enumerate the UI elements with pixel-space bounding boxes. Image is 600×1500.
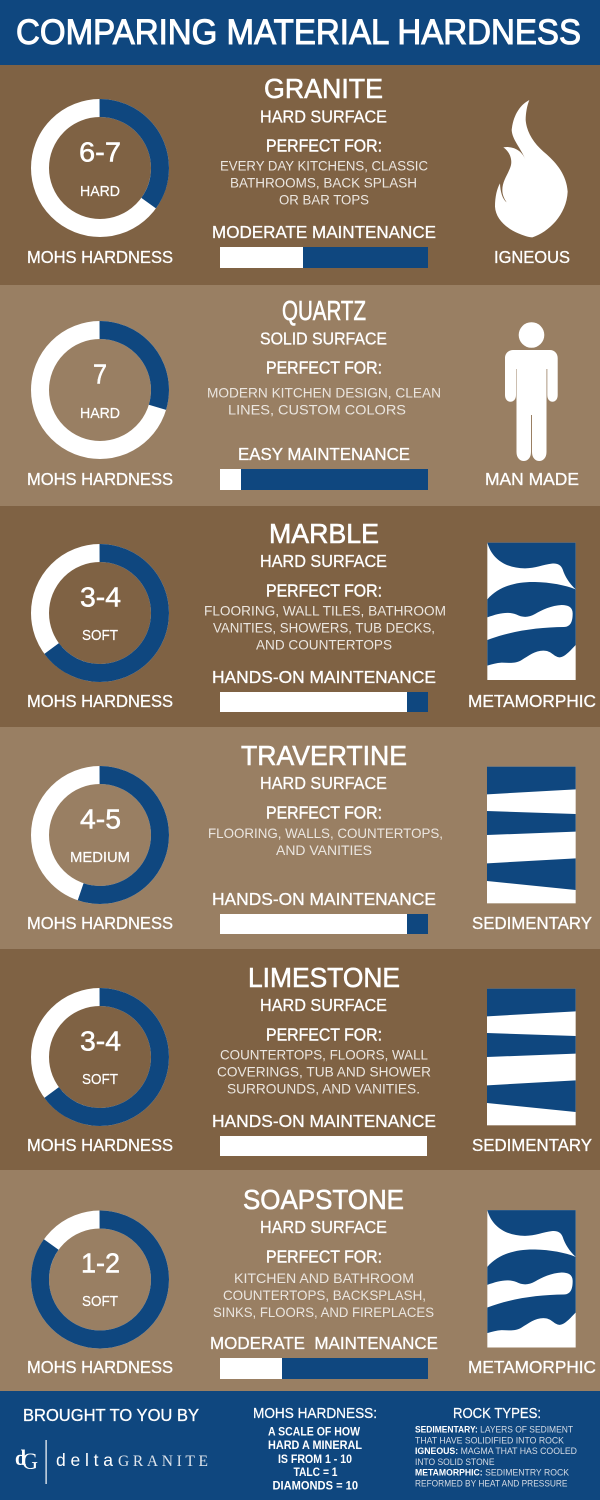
uses text [208,825,443,858]
donut chart: quartz 7 hard [40,330,160,450]
uses text: LINES, CUSTOM COLORS [228,402,406,418]
logo: delta granite: delta [56,1450,113,1470]
subheading: HARD SURFACE [260,1217,387,1237]
perfect for heading: PERFECT FOR: [266,358,382,378]
donut chart: limestone 3-4 soft [40,997,160,1117]
maintenance bar [220,1358,428,1379]
logo: delta granite: G [22,1449,38,1474]
logo: delta granite [15,1440,208,1484]
icon: sedimentary layers [487,989,576,1125]
maintenance label: HANDS-ON MAINTENANCE [212,889,436,909]
donut chart: travertine 4-5 medium [40,775,160,895]
perfect for heading: PERFECT FOR: [266,580,382,600]
icon: flame [495,100,568,237]
maintenance label: HANDS-ON MAINTENANCE [212,1111,436,1131]
panel: limestone [0,949,600,1170]
uses text: FLOORING, WALLS, COUNTERTOPS, [208,825,443,841]
rock type label: SEDIMENTARY [472,1135,592,1155]
mohs hardness explanation: HARD A MINERAL [268,1440,362,1452]
donut label: MOHS HARDNESS [27,913,173,933]
maintenance bar [220,469,428,490]
heading: travertine: TRAVERTINE [241,740,407,771]
icon: metamorphic layers [487,1210,576,1347]
uses text: AND COUNTERTOPS [256,636,392,652]
donut chart: travertine 4-5 medium: 4-5 [80,804,121,834]
uses text [217,1046,431,1096]
uses text [213,1270,434,1320]
donut chart: granite 6-7 hard [40,108,160,228]
perfect for heading: PERFECT FOR: [266,802,382,822]
donut label: MOHS HARDNESS [27,247,173,267]
rock type label: SEDIMENTARY [472,913,592,933]
logo: delta granite: d [15,1445,26,1470]
donut chart: granite 6-7 hard: 6-7 [79,136,121,168]
mohs hardness explanation [253,1405,377,1492]
donut label: MOHS HARDNESS [27,469,173,489]
rock types explanation: THAT HAVE SOLIDIFIED INTO ROCK [415,1436,565,1446]
uses text: BATHROOMS, BACK SPLASH [230,174,417,190]
subheading: HARD SURFACE [260,995,387,1015]
uses text [220,158,428,208]
heading: marble: MARBLE [269,518,379,549]
perfect for heading: PERFECT FOR: [266,136,382,156]
uses text [207,384,441,418]
donut chart: soapstone 1-2 soft [40,1220,160,1340]
uses text: AND VANITIES [276,842,372,858]
subheading: HARD SURFACE [260,773,387,793]
uses text: COUNTERTOPS, FLOORS, WALL [220,1046,428,1062]
brought to you by heading: BROUGHT TO YOU BY [23,1405,199,1425]
donut chart: marble 3-4 soft: SOFT [82,628,118,644]
icon: person [505,322,558,461]
icon: sedimentary layers [487,767,576,903]
mohs hardness explanation: TALC = 1 [294,1467,338,1479]
maintenance label: MODERATE MAINTENANCE [210,1333,438,1353]
panel: marble [0,506,600,727]
donut chart: soapstone 1-2 soft: SOFT [82,1294,118,1310]
panel: soapstone [0,1170,600,1391]
donut label: MOHS HARDNESS [27,691,173,711]
perfect for heading: PERFECT FOR: [266,1024,382,1044]
uses text: MODERN KITCHEN DESIGN, CLEAN [207,384,441,400]
rock types explanation: ROCK TYPES: [453,1405,541,1422]
uses text: OR BAR TOPS [279,192,369,208]
rock types explanation: IGNEOUS: MAGMA THAT HAS COOLED [415,1446,577,1457]
uses text: EVERY DAY KITCHENS, CLASSIC [220,158,428,174]
maintenance label: MODERATE MAINTENANCE [212,222,436,242]
uses text: KITCHEN AND BATHROOM [234,1270,414,1286]
rock types explanation [415,1405,577,1490]
mohs hardness explanation: MOHS HARDNESS: [253,1405,377,1422]
panel: footer [0,1391,600,1500]
heading: limestone: LIMESTONE [248,962,400,993]
rock type label: MAN MADE [485,469,579,489]
title: COMPARING MATERIAL HARDNESS [16,13,581,52]
uses text: COVERINGS, TUB AND SHOWER [217,1064,431,1080]
mohs hardness explanation: A SCALE OF HOW [268,1426,360,1438]
donut chart: granite 6-7 hard: HARD [80,184,120,200]
heading: quartz: QUARTZ [282,295,366,326]
rock type label: IGNEOUS [494,247,570,267]
uses text: SINKS, FLOORS, AND FIREPLACES [213,1304,434,1320]
donut chart: limestone 3-4 soft: 3-4 [80,1026,121,1056]
donut chart: quartz 7 hard: 7 [93,358,107,390]
uses text: COUNTERTOPS, BACKSPLASH, [223,1287,426,1303]
uses text [204,602,446,652]
mohs hardness explanation: IS FROM 1 - 10 [278,1454,352,1466]
panel: quartz [0,285,600,506]
panel: travertine [0,727,600,949]
logo: delta granite: GRANITE [118,1453,208,1470]
maintenance bar [220,247,428,268]
donut chart: soapstone 1-2 soft: 1-2 [81,1248,120,1278]
maintenance bar [220,1136,427,1156]
rock types explanation: METAMORPHIC: SEDIMENTRY ROCK [415,1468,570,1479]
donut label: MOHS HARDNESS [27,1357,173,1377]
mohs hardness explanation: DIAMONDS = 10 [272,1480,358,1492]
uses text: SURROUNDS, AND VANITIES. [227,1080,420,1096]
perfect for heading: PERFECT FOR: [266,1246,382,1266]
subheading: HARD SURFACE [260,551,387,571]
donut chart: travertine 4-5 medium: MEDIUM [70,850,130,866]
maintenance bar [220,692,428,712]
subheading: SOLID SURFACE [260,328,387,348]
heading: soapstone: SOAPSTONE [243,1184,404,1215]
rock types explanation: REFORMED BY HEAT AND PRESSURE [415,1479,568,1490]
panel: granite [0,65,600,285]
uses text: VANITIES, SHOWERS, TUB DECKS, [213,620,435,636]
maintenance bar [220,914,428,934]
rock type label: METAMORPHIC [468,1357,596,1377]
heading: granite: GRANITE [264,73,383,104]
rock type label: METAMORPHIC [468,691,596,711]
uses text: FLOORING, WALL TILES, BATHROOM [204,602,446,618]
maintenance label: EASY MAINTENANCE [238,444,410,464]
rock types explanation: INTO SOLID STONE [415,1457,494,1468]
donut chart: marble 3-4 soft [40,553,160,673]
maintenance label: HANDS-ON MAINTENANCE [212,667,436,687]
rock types explanation: SEDIMENTARY: LAYERS OF SEDIMENT [415,1424,573,1436]
donut chart: quartz 7 hard: HARD [80,406,120,422]
donut chart: limestone 3-4 soft: SOFT [82,1072,118,1088]
donut label: MOHS HARDNESS [27,1135,173,1155]
subheading: HARD SURFACE [260,106,387,126]
header banner [0,0,600,65]
donut chart: marble 3-4 soft: 3-4 [80,582,121,612]
icon: metamorphic layers [487,543,576,680]
